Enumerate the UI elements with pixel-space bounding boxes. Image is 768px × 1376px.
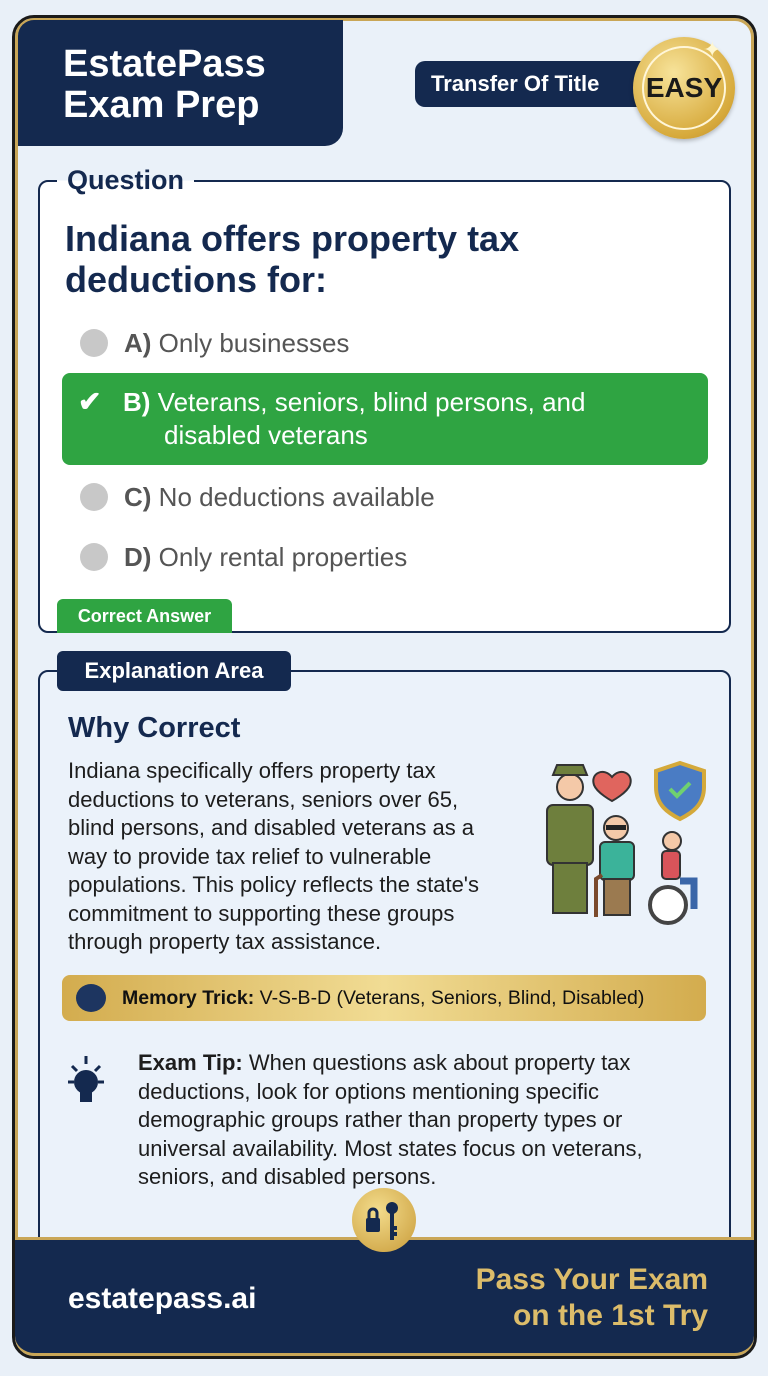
- exam tip: [68, 1050, 643, 1189]
- exam tip text: seniors, and disabled persons.: [138, 1164, 436, 1189]
- footer tagline: [476, 1263, 708, 1332]
- why correct text: commitment to supporting these groups: [68, 900, 454, 926]
- exam tip text: demographic groups rather than property types or: [138, 1107, 622, 1132]
- question text: Indiana offers property tax: [65, 218, 519, 259]
- option D: D) Only rental properties: [124, 542, 407, 572]
- why correct text: deductions to veterans, seniors over 65,: [68, 786, 458, 812]
- why correct text: Indiana specifically offers property tax: [68, 758, 436, 783]
- explanation label: [57, 651, 291, 691]
- footer url: estatepass.ai: [68, 1282, 256, 1315]
- question text: deductions for:: [65, 259, 327, 300]
- footer: [15, 1237, 754, 1356]
- question label: Question: [67, 165, 184, 195]
- correct answer tag: [57, 599, 232, 633]
- badge: EASY: EASY: [646, 72, 722, 103]
- memory trick bar: [62, 975, 706, 1021]
- explanation label: Explanation Area: [85, 658, 263, 683]
- badge: EASY: [633, 37, 735, 139]
- exam tip text: deductions, look for options mentioning specific: [138, 1078, 599, 1104]
- header title block: [18, 20, 343, 146]
- option B correct: B) Veterans, seniors, blind persons, and: [123, 387, 585, 417]
- panel: question: [38, 180, 731, 633]
- icon: brain: [76, 984, 106, 1012]
- header title block: Exam Prep: [63, 84, 259, 126]
- exam tip text: Exam Tip: When questions ask about property tax: [138, 1050, 630, 1075]
- exam tip text: universal availability. Most states focus on veterans,: [138, 1136, 643, 1160]
- question text: [65, 218, 519, 300]
- badge: EASY: ✦: [703, 37, 721, 62]
- exam tip text: [138, 1050, 643, 1189]
- correct answer tag: Correct Answer: [78, 606, 211, 626]
- topic pill: [415, 61, 650, 107]
- why correct heading: Why Correct: [68, 712, 240, 744]
- panel: explanation: [38, 670, 731, 1270]
- icon: light bulb: [68, 1056, 104, 1102]
- why correct text: [68, 758, 479, 954]
- icon: veterans seniors disabled illustration: [546, 760, 706, 925]
- option B correct: ✔: [78, 386, 101, 417]
- why correct text: populations. This policy reflects the state's: [68, 872, 479, 897]
- option C: C) No deductions available: [124, 482, 435, 512]
- topic pill: Transfer Of Title: [431, 71, 599, 96]
- header title block: EstatePass: [63, 43, 266, 85]
- why correct text: way to provide tax relief to vulnerable: [68, 844, 431, 868]
- option A: A) Only businesses: [124, 328, 349, 358]
- option B correct: [62, 373, 708, 465]
- why correct text: blind persons, and disabled veterans as a: [68, 815, 474, 840]
- footer tagline: Pass Your Exam: [476, 1263, 708, 1296]
- icon: lock and key: [352, 1188, 416, 1252]
- option B correct: disabled veterans: [164, 420, 368, 450]
- why correct text: through property tax assistance.: [68, 929, 381, 954]
- footer tagline: on the 1st Try: [513, 1299, 708, 1332]
- memory trick bar: Memory Trick: V-S-B-D (Veterans, Seniors, Blind, Disabled): [122, 987, 644, 1009]
